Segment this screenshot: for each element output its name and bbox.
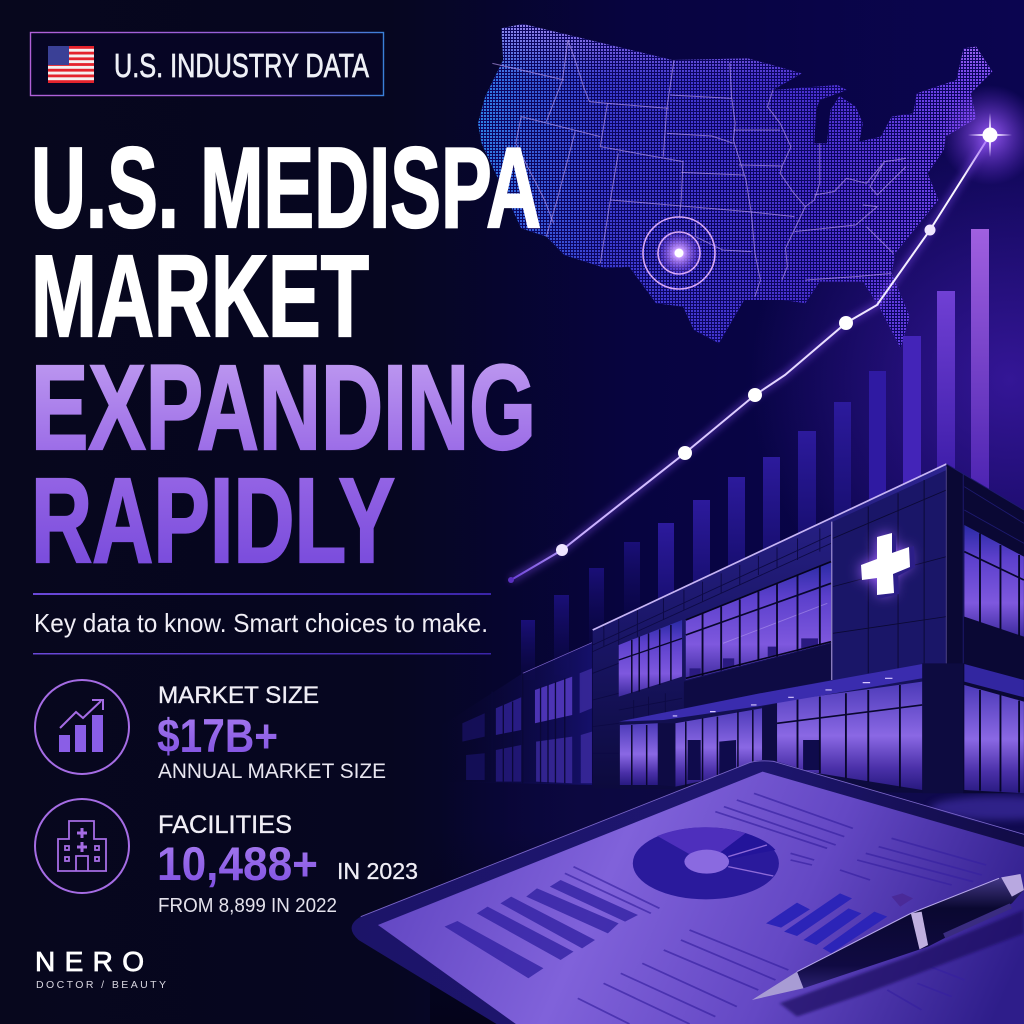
- glowing star endpoint: [940, 85, 1024, 185]
- upper windows right: [686, 562, 831, 680]
- report text lines: [565, 793, 986, 1024]
- growth bars: [521, 229, 989, 680]
- far wing: [440, 643, 592, 785]
- dark spandrel: [684, 643, 831, 708]
- icon: rising bar chart: [35, 680, 129, 774]
- map state borders: [492, 40, 906, 297]
- stat: facilities: [35, 799, 418, 917]
- market size value: $17B+: [157, 709, 278, 762]
- side lower windows: [964, 685, 1024, 793]
- title line 1: U.S. MEDISPA: [31, 125, 541, 252]
- market size label: MARKET SIZE: [158, 682, 319, 709]
- left bar chart: [445, 880, 638, 978]
- side wall edge panels: [946, 464, 1024, 663]
- side canopy: [964, 664, 1024, 697]
- sign panel: [833, 470, 946, 680]
- main wall: [593, 464, 946, 793]
- title line 3: EXPANDING: [31, 339, 536, 475]
- facilities caption: FROM 8,899 IN 2022: [158, 895, 337, 917]
- pen: [752, 874, 1024, 1000]
- right bar chart: [766, 893, 913, 953]
- facilities label: FACILITIES: [158, 811, 292, 839]
- tablet with report: [352, 760, 1024, 1024]
- icon: hospital: [35, 799, 129, 893]
- title line 4: RAPIDLY: [31, 452, 395, 588]
- subtitle: Key data to know. Smart choices to make.: [34, 608, 488, 638]
- glowing cross sign: [861, 533, 915, 599]
- corner column: [922, 663, 963, 793]
- map location target: [643, 217, 715, 289]
- market size caption: ANNUAL MARKET SIZE: [158, 760, 386, 783]
- logo: NERO: [35, 946, 166, 991]
- lower windows entrance: [620, 708, 762, 787]
- pen shadow: [780, 910, 1024, 1017]
- tablet screen: [378, 772, 1024, 1024]
- pie chart: [633, 827, 779, 899]
- side upper windows: [964, 525, 1024, 637]
- logo: NERO: NERO: [35, 946, 144, 977]
- badge text: U.S. INDUSTRY DATA: [114, 47, 369, 84]
- map of the United States: [470, 20, 1000, 360]
- title line 2: MARKET: [31, 231, 369, 361]
- building: [440, 464, 1024, 793]
- stat: market size: [35, 680, 386, 783]
- canopy: [619, 664, 922, 722]
- wall panel grid: [593, 528, 831, 753]
- badge: U.S. industry data: [30, 32, 384, 96]
- growth trend line: [508, 85, 1024, 583]
- icon: U.S. flag: [48, 46, 94, 83]
- roof edge: [593, 464, 946, 630]
- title: [31, 125, 541, 588]
- side wall: [946, 464, 1024, 793]
- facilities value: 10,488+: [157, 837, 318, 890]
- tablet frame: [352, 760, 1024, 1024]
- ground: [430, 782, 1024, 1024]
- logo: NERO: DOCTOR / BEAUTY: [36, 979, 166, 991]
- lobby windows: [777, 682, 922, 790]
- facilities year: IN 2023: [337, 858, 418, 884]
- sign panel grid: [833, 480, 946, 673]
- upper windows left: [619, 620, 682, 697]
